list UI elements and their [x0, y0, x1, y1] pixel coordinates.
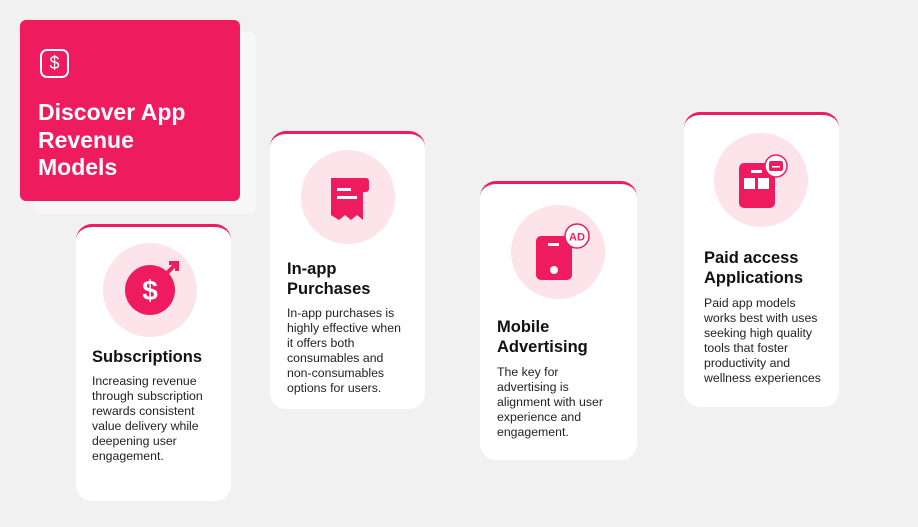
text: The key for	[497, 365, 559, 379]
heading: Advertising	[497, 338, 588, 356]
text: works best with uses	[704, 311, 817, 325]
title: Models	[38, 154, 117, 180]
text: tools that foster	[704, 341, 788, 355]
panel: in-app purchases	[270, 131, 425, 409]
title: Revenue	[38, 126, 134, 152]
heading: Subscriptions	[92, 348, 202, 366]
text: productivity and	[704, 356, 790, 370]
text	[92, 374, 203, 463]
text: experience and	[497, 410, 581, 424]
text: deepening user	[92, 434, 177, 448]
text: highly effective when	[287, 321, 401, 335]
heading	[287, 260, 370, 298]
text: In-app purchases is	[287, 306, 394, 320]
text: Paid app models	[704, 296, 796, 310]
title: Discover App	[38, 99, 185, 125]
text: wellness experiences	[704, 371, 821, 385]
text: it offers both	[287, 336, 354, 350]
text: through subscription	[92, 389, 203, 403]
title	[38, 99, 185, 180]
heading: Applications	[704, 269, 803, 287]
icon: receipt	[301, 150, 395, 244]
text: value delivery while	[92, 419, 199, 433]
icon: phone AD: AD	[569, 232, 585, 244]
heading	[497, 318, 588, 356]
icon: dollar growth	[103, 243, 197, 337]
text	[287, 306, 401, 395]
icon: dollar: $	[49, 53, 60, 73]
heading: Mobile	[497, 318, 549, 336]
text: advertising is	[497, 380, 569, 394]
text: engagement.	[497, 425, 569, 439]
text: options for users.	[287, 381, 381, 395]
panel: mobile advertising	[480, 181, 637, 460]
icon: dollar growth: $	[142, 275, 158, 306]
text: Increasing revenue	[92, 374, 197, 388]
header shadow card	[34, 32, 256, 214]
heading: In-app	[287, 260, 336, 278]
icon: dollar	[40, 49, 69, 78]
header card	[20, 20, 240, 201]
text: seeking high quality	[704, 326, 812, 340]
text: alignment with user	[497, 395, 603, 409]
icon: paid app	[714, 133, 808, 227]
heading: Paid access	[704, 249, 798, 267]
text: engagement.	[92, 449, 164, 463]
icon: phone AD	[511, 205, 605, 299]
heading: Purchases	[287, 280, 370, 298]
text	[497, 365, 603, 439]
text: rewards consistent	[92, 404, 195, 418]
text: non-consumables	[287, 366, 384, 380]
panel: paid access	[684, 112, 839, 407]
text: consumables and	[287, 351, 383, 365]
panel: subscriptions	[76, 224, 231, 501]
text	[704, 296, 821, 385]
heading	[704, 249, 803, 287]
